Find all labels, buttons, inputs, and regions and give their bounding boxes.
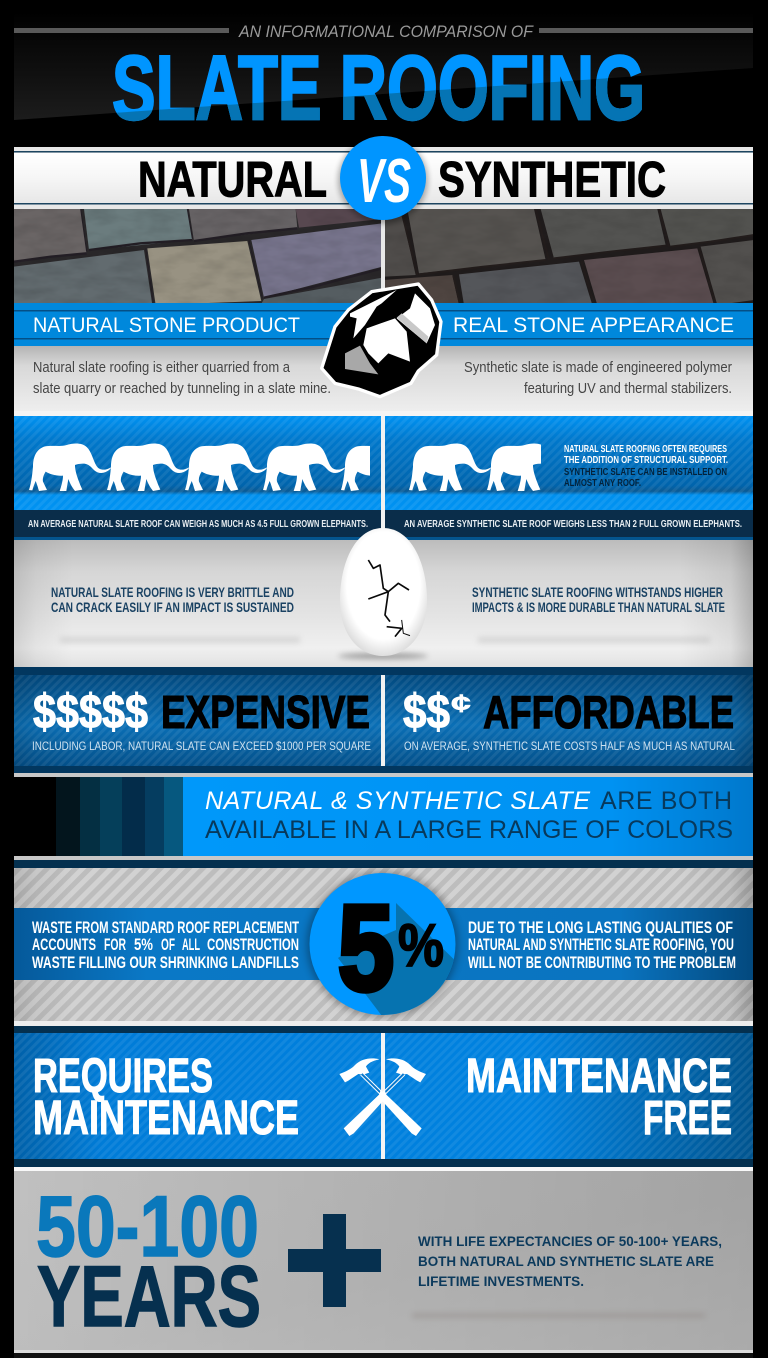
maintenance free: FREE	[643, 1092, 732, 1145]
requires maintenance: MAINTENANCE	[33, 1092, 299, 1145]
panel: colors	[14, 773, 753, 860]
waste text: WASTE FILLING OUR SHRINKING LANDFILLS	[32, 954, 299, 972]
photo: natural slate	[14, 209, 382, 305]
divider between photos	[381, 209, 385, 303]
panel: maintenance	[14, 1021, 753, 1167]
requires maintenance: REQUIRES	[33, 1050, 213, 1103]
waste text: ALL	[182, 936, 200, 954]
waste text: FOR	[104, 936, 126, 954]
colors text line one: NATURAL & SYNTHETIC SLATE	[205, 787, 590, 815]
5 percent badge: %	[398, 912, 444, 979]
natural vs synthetic band	[14, 147, 753, 209]
header rule right	[539, 28, 753, 33]
colors text line one: ARE BOTH	[600, 787, 732, 815]
header rule left	[14, 28, 229, 33]
colors text line two: AVAILABLE IN A LARGE RANGE OF COLORS	[205, 816, 733, 844]
elephants: natural slate weight	[29, 444, 370, 491]
brittle text: CAN CRACK EASILY IF AN IMPACT IS SUSTAINED	[51, 599, 294, 615]
synthetic heading: SYNTHETIC	[438, 150, 666, 208]
panel: cost	[14, 667, 753, 773]
elephants: synthetic slate weight	[409, 444, 541, 491]
natural description: Natural slate roofing is either quarried from a	[33, 360, 291, 376]
50-100 figure: 50-100	[36, 1179, 259, 1275]
natural cost note: INCLUDING LABOR, NATURAL SLATE CAN EXCEED $1000 PER SQUARE	[32, 741, 371, 753]
lifetime text: LIFETIME INVESTMENTS.	[418, 1273, 584, 1289]
icon: crossed hammers	[339, 1058, 426, 1136]
brittle text: NATURAL SLATE ROOFING IS VERY BRITTLE AND	[51, 584, 294, 600]
natural heading: NATURAL	[138, 150, 327, 208]
panel: lifetime	[14, 1167, 753, 1358]
vs badge	[338, 136, 428, 224]
synthetic description: Synthetic slate is made of engineered polymer	[464, 360, 732, 376]
waste text: OF	[161, 936, 175, 954]
subtitle: AN INFORMATIONAL COMPARISON OF	[238, 23, 534, 41]
panel: durability	[14, 540, 753, 667]
natural weight caption: AN AVERAGE NATURAL SLATE ROOF CAN WEIGH AS MUCH AS 4.5 FULL GROWN ELEPHANTS.	[28, 518, 368, 530]
natural heading: NATURAL STONE PRODUCT	[33, 313, 300, 337]
natural cost symbols: $$$$$	[33, 686, 148, 739]
vs badge: VS	[357, 147, 411, 216]
synthetic description: featuring UV and thermal stabilizers.	[524, 381, 732, 397]
waste text: CONSTRUCTION	[207, 936, 299, 954]
years: YEARS	[37, 1249, 261, 1345]
section divider	[14, 411, 753, 416]
icon: cracked egg	[338, 528, 428, 659]
real stone heading: REAL STONE APPEARANCE	[453, 313, 734, 337]
natural description: slate quarry or reached by tunneling in a slate mine.	[33, 381, 331, 397]
photo: synthetic slate	[384, 209, 754, 305]
structural support note: ALMOST ANY ROOF.	[564, 478, 641, 489]
blue text band	[14, 908, 753, 980]
panel: landfill waste	[14, 860, 753, 1021]
panel: natural vs synthetic facts	[14, 303, 753, 411]
waste text: ACCOUNTS	[32, 936, 96, 954]
blue heading band	[14, 303, 753, 346]
waste text: 5%	[134, 936, 153, 954]
expensive heading: EXPENSIVE	[161, 686, 370, 738]
color swatches	[14, 777, 183, 856]
waste text: WASTE FROM STANDARD ROOF REPLACEMENT	[32, 919, 299, 937]
panel: weight	[14, 416, 753, 540]
5 percent badge: 5	[338, 880, 394, 1016]
header	[14, 26, 753, 122]
plus sign	[288, 1214, 381, 1307]
synthetic cost symbols: $$	[403, 686, 450, 739]
lifetime text: WITH LIFE EXPECTANCIES OF 50-100+ YEARS,	[418, 1233, 722, 1249]
cents symbol: ¢	[451, 690, 471, 718]
lifetime text: BOTH NATURAL AND SYNTHETIC SLATE ARE	[418, 1253, 714, 1269]
5 percent badge	[306, 871, 470, 1020]
structural support note: SYNTHETIC SLATE CAN BE INSTALLED ON	[564, 467, 727, 478]
icon: slate rock	[322, 284, 441, 397]
